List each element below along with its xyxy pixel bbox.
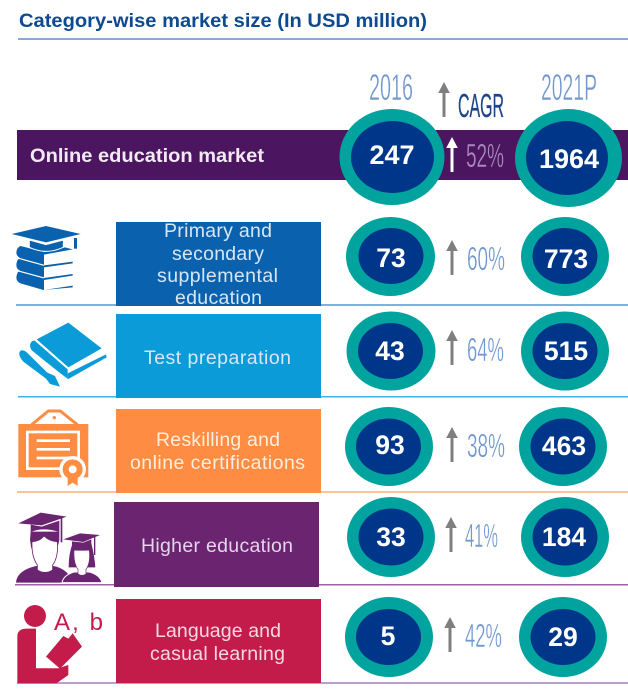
panel: primary and secondary supplemental education <box>12 217 609 309</box>
category label: Primary and <box>164 220 272 242</box>
category label <box>130 429 305 474</box>
circle: 184: 184 <box>542 522 586 552</box>
category label <box>150 620 285 665</box>
panel: online education market <box>17 109 628 207</box>
arrow <box>446 240 458 275</box>
circle: 73: 73 <box>376 243 406 273</box>
panel: language and casual learning <box>17 597 607 683</box>
category label: Reskilling and <box>156 429 280 451</box>
arrow <box>445 517 457 552</box>
circle: 43 <box>346 312 436 390</box>
icon: reader with letters <box>17 605 103 683</box>
growth: 52%: 52% <box>466 137 504 174</box>
circle: 247 <box>340 109 444 205</box>
category label: Language and <box>155 620 281 642</box>
icon: reader with letters: A, b <box>54 609 103 636</box>
category label: Test preparation <box>144 347 291 369</box>
growth: 64%: 64% <box>467 331 504 368</box>
circle: 29 <box>519 597 607 677</box>
arrow <box>446 427 458 462</box>
panel: higher education: 41% <box>465 517 498 554</box>
circle: 1964: 1964 <box>539 144 599 174</box>
circle: 5: 5 <box>381 621 395 651</box>
circle: 43: 43 <box>375 336 405 366</box>
growth: 42%: 42% <box>465 617 502 654</box>
category label: supplemental <box>157 265 278 287</box>
category label: Higher education <box>141 535 293 557</box>
growth: 60%: 60% <box>467 240 505 277</box>
title: Category-wise market size (In USD million) <box>19 10 427 32</box>
circle: 33: 33 <box>376 522 406 552</box>
icon: certificate <box>18 411 88 486</box>
circle: 5 <box>345 597 433 677</box>
circle: 93: 93 <box>375 430 405 460</box>
circle: 93 <box>345 407 433 486</box>
icon: graduates <box>16 513 102 583</box>
circle: 773 <box>521 217 609 296</box>
circle: 1964 <box>515 109 622 207</box>
circle: 73 <box>346 217 435 296</box>
circle: 184 <box>521 497 609 577</box>
arrow: white <box>446 137 458 172</box>
icon: graduation cap on books <box>12 226 81 290</box>
category label <box>157 220 278 309</box>
category label: secondary <box>172 243 264 265</box>
category label: online certifications <box>130 452 305 474</box>
panel: reskilling and online certifications <box>18 407 607 493</box>
arrow <box>444 617 456 652</box>
category label: education <box>175 287 262 309</box>
circle: 463: 463 <box>542 431 586 461</box>
icon: book and pen <box>19 323 107 387</box>
circle: 33 <box>347 497 435 577</box>
column heading: CAGR <box>438 82 504 124</box>
panel: test preparation <box>19 312 609 398</box>
infographic canvas: CAGR <box>458 87 504 124</box>
circle: 247: 247 <box>369 140 415 170</box>
category label: casual learning <box>150 643 285 665</box>
growth: 38%: 38% <box>467 427 505 464</box>
circle: 515: 515 <box>544 336 588 366</box>
circle: 463 <box>519 407 607 486</box>
panel: higher education <box>16 497 609 587</box>
row divider lines <box>15 304 628 684</box>
circle: 773: 773 <box>544 244 588 274</box>
column heading: 2016: 2016 <box>369 67 413 108</box>
circle: 29: 29 <box>548 622 578 652</box>
circle: 515 <box>521 312 609 390</box>
banner label: Online education market <box>30 145 265 167</box>
arrow <box>446 330 458 365</box>
